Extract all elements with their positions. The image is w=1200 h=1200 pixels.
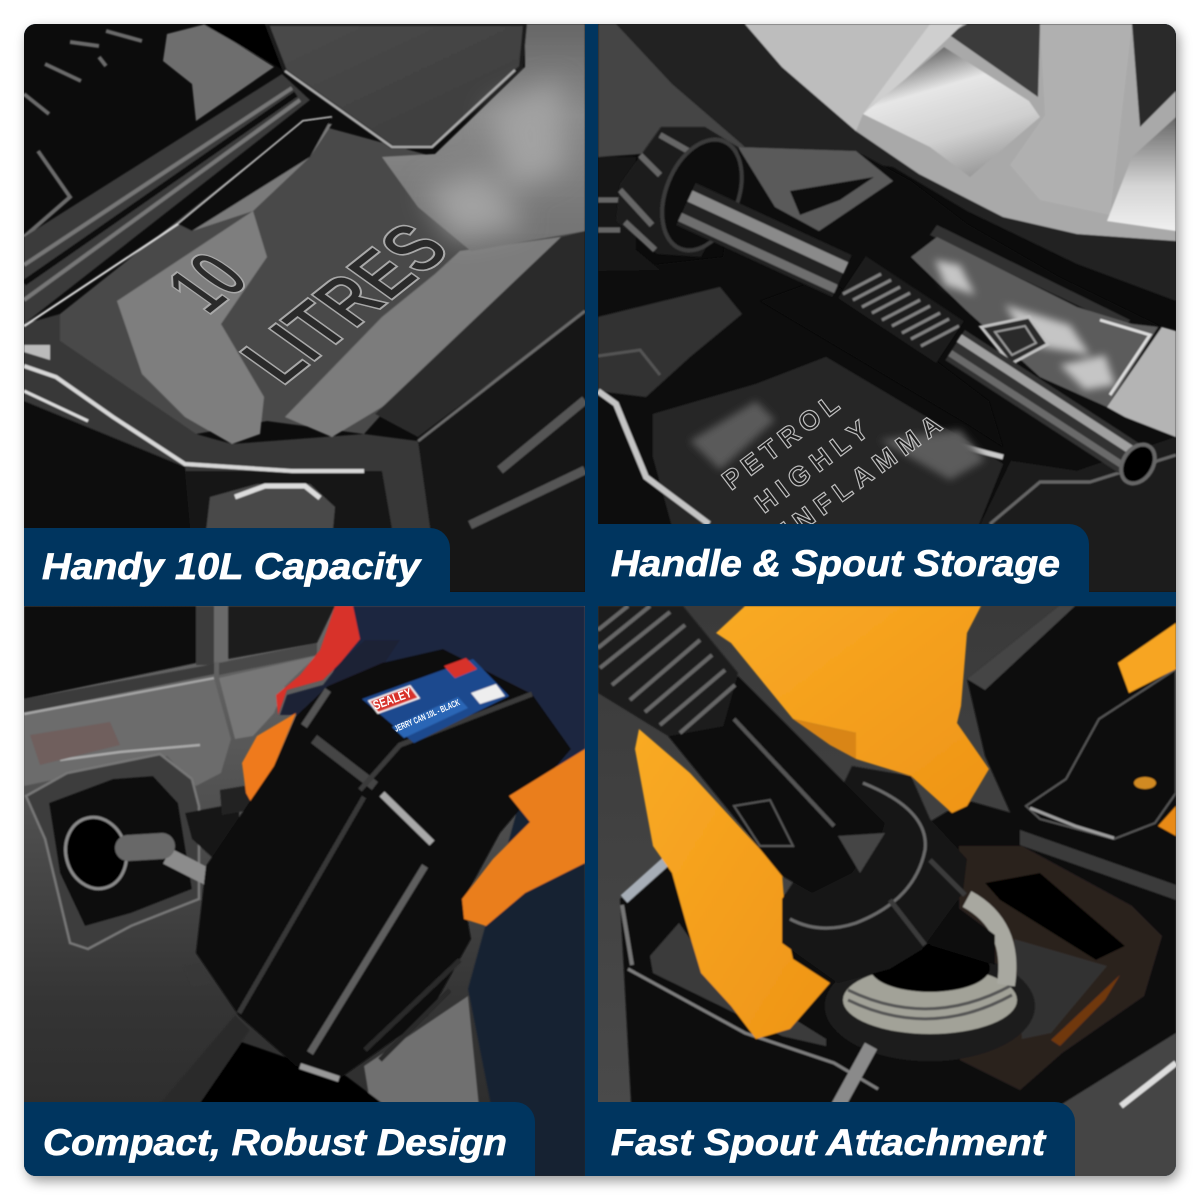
far-left fitting xyxy=(598,157,660,271)
gloss line xyxy=(628,969,878,1089)
spout cap xyxy=(616,127,742,257)
red reflection xyxy=(30,722,120,765)
red jacket xyxy=(276,606,360,715)
white edge line xyxy=(24,117,332,326)
soft light on upper right plate xyxy=(425,80,565,240)
caption: compact robust design xyxy=(24,1102,535,1176)
brown tray xyxy=(959,846,1162,1090)
lower-right recesses xyxy=(375,231,585,437)
caption: handy 10L capacity xyxy=(24,528,450,606)
black wedge xyxy=(204,24,281,68)
diagonal band xyxy=(24,74,310,324)
can label text: JERRY CAN 10L - BLACK xyxy=(393,697,462,734)
spout recess xyxy=(267,24,525,147)
wheel rim xyxy=(745,24,1176,241)
light patch top-left xyxy=(163,24,274,121)
glossy ridge lines xyxy=(24,366,364,471)
bottle neck flange xyxy=(825,951,1035,1061)
black bracket xyxy=(185,803,239,859)
caption: compact robust design: Compact, Robust Design xyxy=(43,1122,507,1163)
upper glove xyxy=(716,606,989,813)
window trim xyxy=(24,664,214,713)
glossy plate xyxy=(911,237,1158,407)
can facets xyxy=(196,749,357,1006)
caption: fast spout attachment: Fast Spout Attachment xyxy=(611,1122,1047,1163)
can label xyxy=(362,659,509,743)
inner tray xyxy=(650,923,826,1046)
storage blade xyxy=(760,277,1003,447)
car windows xyxy=(24,606,196,699)
can label text xyxy=(371,685,462,734)
bottom right gloss xyxy=(1059,1033,1176,1176)
embossed text: 10 litres: 10 xyxy=(148,239,266,326)
right glove xyxy=(1118,623,1176,693)
right lower car body xyxy=(364,996,486,1176)
right blotch xyxy=(1107,327,1176,437)
spout smooth tube xyxy=(668,676,885,893)
embossed text: 10 litres: LITRES xyxy=(222,209,467,397)
lower-right xyxy=(980,438,1176,592)
caption: handle and spout storage: Handle & Spout Storage xyxy=(611,543,1060,584)
ridge band xyxy=(24,314,439,540)
spout ribbed section xyxy=(852,277,950,342)
label plate xyxy=(652,356,1004,524)
panel: fast spout attachment photo xyxy=(598,606,1176,1176)
diamond emblem xyxy=(981,317,1048,364)
bottom block xyxy=(184,470,392,528)
embossed warning text: INFLAMMA xyxy=(776,409,947,545)
caption: handy 10L capacity: Handy 10L Capacity xyxy=(42,546,423,587)
groove xyxy=(930,225,1130,328)
can label text: SEALEY xyxy=(371,685,414,713)
lower-left black xyxy=(40,408,185,468)
panel: compact robust design photo xyxy=(24,606,585,1176)
caption: handle and spout storage xyxy=(585,524,1089,606)
bracket xyxy=(1026,669,1176,839)
panel: handy 10L capacity photo xyxy=(24,24,585,592)
grey floor xyxy=(598,24,745,157)
embossed warning text: PETROL xyxy=(717,389,845,496)
plateau xyxy=(60,121,585,434)
right glove xyxy=(462,749,585,926)
embossed warning text xyxy=(720,398,944,524)
left glove xyxy=(635,729,830,1039)
spout ribbed hose xyxy=(598,606,738,736)
clip xyxy=(183,963,210,986)
wheel arch xyxy=(160,1036,382,1176)
spout nozzle xyxy=(167,856,210,878)
spout lower tube xyxy=(955,345,1138,464)
person torso and legs xyxy=(330,606,585,800)
raised block xyxy=(598,287,742,397)
fuel door xyxy=(26,754,199,949)
car door panels xyxy=(24,678,231,786)
left glove xyxy=(242,713,296,813)
can body xyxy=(196,649,571,1079)
lower can body xyxy=(620,800,1176,1176)
spout cap xyxy=(782,766,967,983)
caption: fast spout attachment xyxy=(585,1102,1075,1176)
bottle neck silver xyxy=(843,966,1017,1034)
gloss streaks xyxy=(24,31,142,237)
wheel tyre xyxy=(616,24,1176,301)
upper can body xyxy=(967,606,1176,873)
ridge xyxy=(598,391,709,524)
embossed text: 10 litres xyxy=(171,224,446,386)
band right xyxy=(1020,830,1176,900)
embossed warning text: HIGHLY xyxy=(750,415,874,519)
spout upper tube xyxy=(686,204,842,276)
panel: handle and spout storage photo xyxy=(598,24,1176,592)
soft gloss blotches xyxy=(690,260,1115,480)
can body xyxy=(598,148,1176,496)
